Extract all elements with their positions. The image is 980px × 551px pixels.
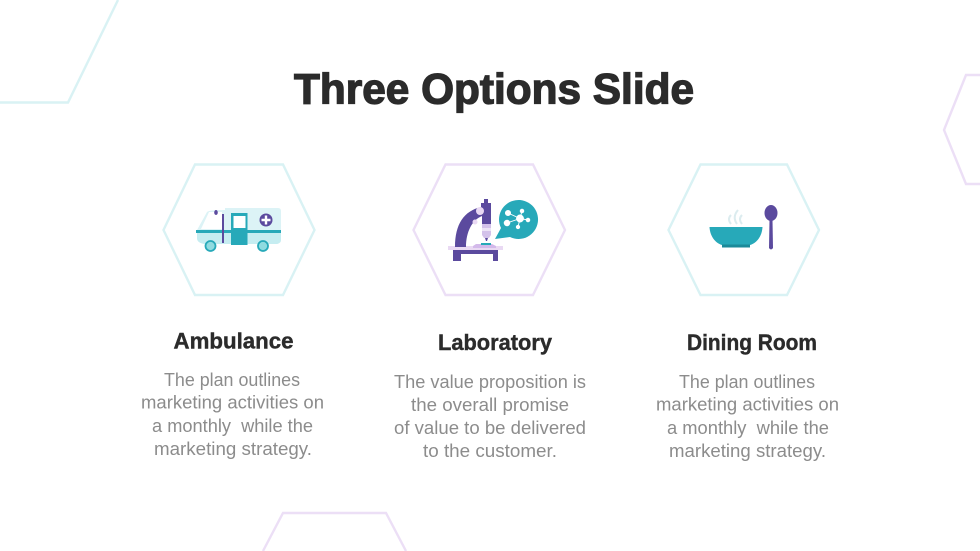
text: dining room description: The plan outlines	[679, 372, 815, 392]
text: laboratory description: The value proposition is	[394, 372, 586, 392]
text: dining room description	[656, 372, 839, 461]
text: ambulance description: marketing activities on	[141, 392, 324, 412]
decorative hexagon: bottom	[263, 513, 406, 551]
text: dining room description: marketing activities on	[656, 394, 839, 414]
icon: microscope with speech bubble	[448, 199, 538, 261]
heading: dining room: Dining Room	[687, 330, 817, 355]
hexagon frame: laboratory	[414, 164, 565, 295]
hexagon frame: ambulance	[164, 164, 314, 295]
hexagon frame: dining room	[668, 164, 819, 295]
panel: dining room	[656, 164, 839, 461]
panel: laboratory	[394, 164, 586, 461]
text: laboratory description: to the customer.	[423, 441, 557, 461]
text: laboratory description: the overall promise	[411, 395, 569, 415]
text: ambulance description: The plan outlines	[164, 370, 300, 390]
text: ambulance description: marketing strategy.	[154, 439, 312, 459]
heading: ambulance: Ambulance	[174, 328, 294, 354]
heading: laboratory: Laboratory	[438, 330, 553, 355]
text: dining room description: marketing strategy.	[669, 441, 826, 461]
icon: ambulance	[196, 208, 281, 251]
text: dining room description: a monthly while the	[667, 418, 829, 438]
decorative hexagon: right edge	[944, 75, 980, 184]
text: laboratory description	[394, 372, 586, 461]
text: ambulance description	[141, 370, 324, 459]
text: laboratory description: of value to be delivered	[394, 418, 586, 438]
title: Three Options Slide	[294, 66, 694, 114]
panel: ambulance	[141, 164, 324, 459]
text: ambulance description: a monthly while the	[152, 416, 313, 436]
decorative hexagon: top left	[0, 0, 118, 102]
icon: soup bowl and spoon	[710, 205, 778, 250]
